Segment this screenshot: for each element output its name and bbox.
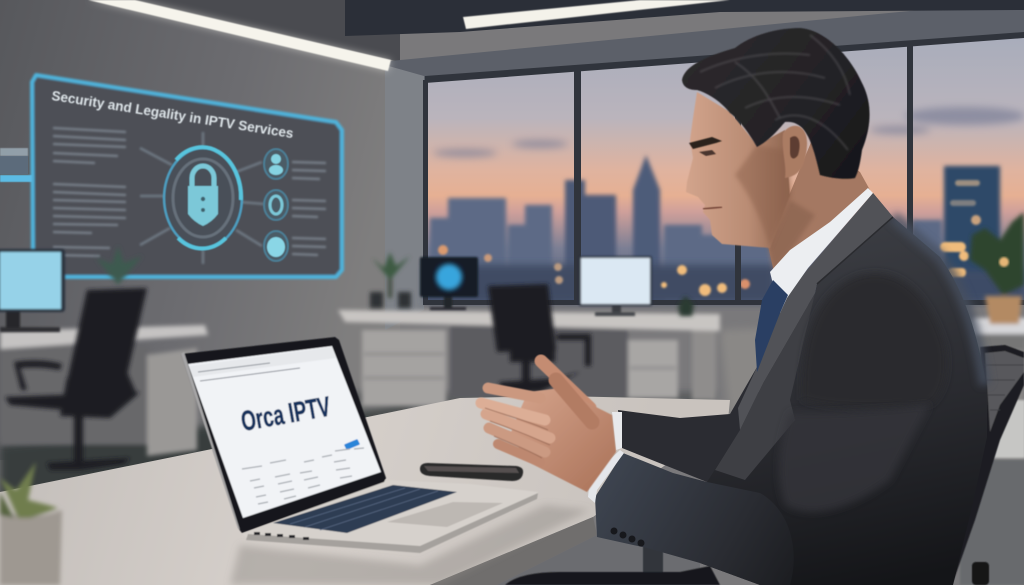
laptop shadow — [230, 505, 590, 585]
ear — [783, 126, 807, 178]
brow — [689, 137, 722, 149]
shirt collar — [770, 188, 873, 313]
right wall and floor beside chair — [960, 400, 1024, 585]
background floor — [0, 320, 1024, 510]
cheek shadow — [735, 145, 792, 248]
city lights — [438, 180, 981, 296]
elbow fold highlight — [779, 404, 930, 512]
small desk plants — [370, 252, 694, 316]
left desk with monitor — [0, 325, 208, 456]
jacket body — [700, 193, 987, 585]
icon: cloud lock — [264, 231, 288, 261]
left monitor — [0, 249, 65, 332]
trackpad — [387, 502, 503, 527]
product name: Orca IPTV — [239, 391, 333, 437]
sleeve buttons — [610, 528, 644, 546]
ports — [254, 532, 309, 540]
plant light — [999, 257, 1009, 267]
connector lines — [140, 132, 264, 264]
near shirt cuff — [588, 450, 624, 503]
chair wheel — [972, 562, 989, 585]
gesturing hands — [481, 361, 616, 492]
mouth — [703, 207, 722, 209]
foreground plant in pot — [0, 462, 62, 585]
eye — [699, 150, 716, 156]
lapel — [738, 193, 893, 430]
main table — [0, 396, 730, 585]
chest panel — [715, 293, 815, 480]
back monitor: blue circle — [420, 257, 478, 310]
necktie — [755, 280, 788, 372]
browser bar — [189, 347, 336, 377]
fingers — [481, 388, 550, 462]
back office chair — [488, 284, 591, 400]
panel title: Security and Legality in IPTV Services — [51, 88, 294, 141]
left office chair — [5, 288, 147, 470]
left edge hologram glow — [0, 175, 32, 182]
hair strands — [700, 35, 850, 150]
chair base under table — [505, 545, 720, 585]
right plant on desk — [970, 212, 1024, 350]
phone on table — [420, 463, 523, 481]
far sleeve — [618, 367, 760, 482]
far shirt cuff — [612, 412, 622, 450]
window mullions — [423, 32, 1024, 305]
man in suit — [588, 28, 987, 585]
keyboard — [273, 485, 457, 533]
left wall plant — [96, 246, 142, 285]
office chair behind man — [935, 345, 1024, 585]
laptop screen — [188, 346, 381, 518]
neck — [768, 140, 870, 272]
laptop — [181, 337, 590, 585]
face — [686, 92, 790, 248]
near sleeve — [595, 453, 794, 585]
screen button — [345, 440, 359, 449]
city skyline — [430, 155, 1000, 302]
back monitor: white screen — [579, 256, 652, 316]
icon: padlock with rings — [164, 147, 242, 249]
laptop base — [242, 480, 538, 553]
palm — [510, 388, 616, 492]
shoulder edge light — [893, 217, 985, 385]
back centre desk — [338, 310, 720, 406]
holographic security panel — [0, 75, 342, 277]
laptop lid — [181, 337, 386, 533]
icon: keyhole — [264, 190, 288, 220]
knuckle creases — [485, 408, 550, 458]
ceiling light strips — [88, 0, 730, 71]
far thumb — [541, 361, 590, 408]
hair — [682, 28, 870, 179]
icon: user — [264, 149, 288, 179]
near thumb — [556, 380, 592, 422]
window with sunset sky — [423, 32, 1024, 305]
panel text lines — [53, 128, 326, 256]
clouds — [433, 107, 1024, 157]
screen table rows — [242, 448, 364, 504]
upper arm shadow — [802, 273, 947, 407]
